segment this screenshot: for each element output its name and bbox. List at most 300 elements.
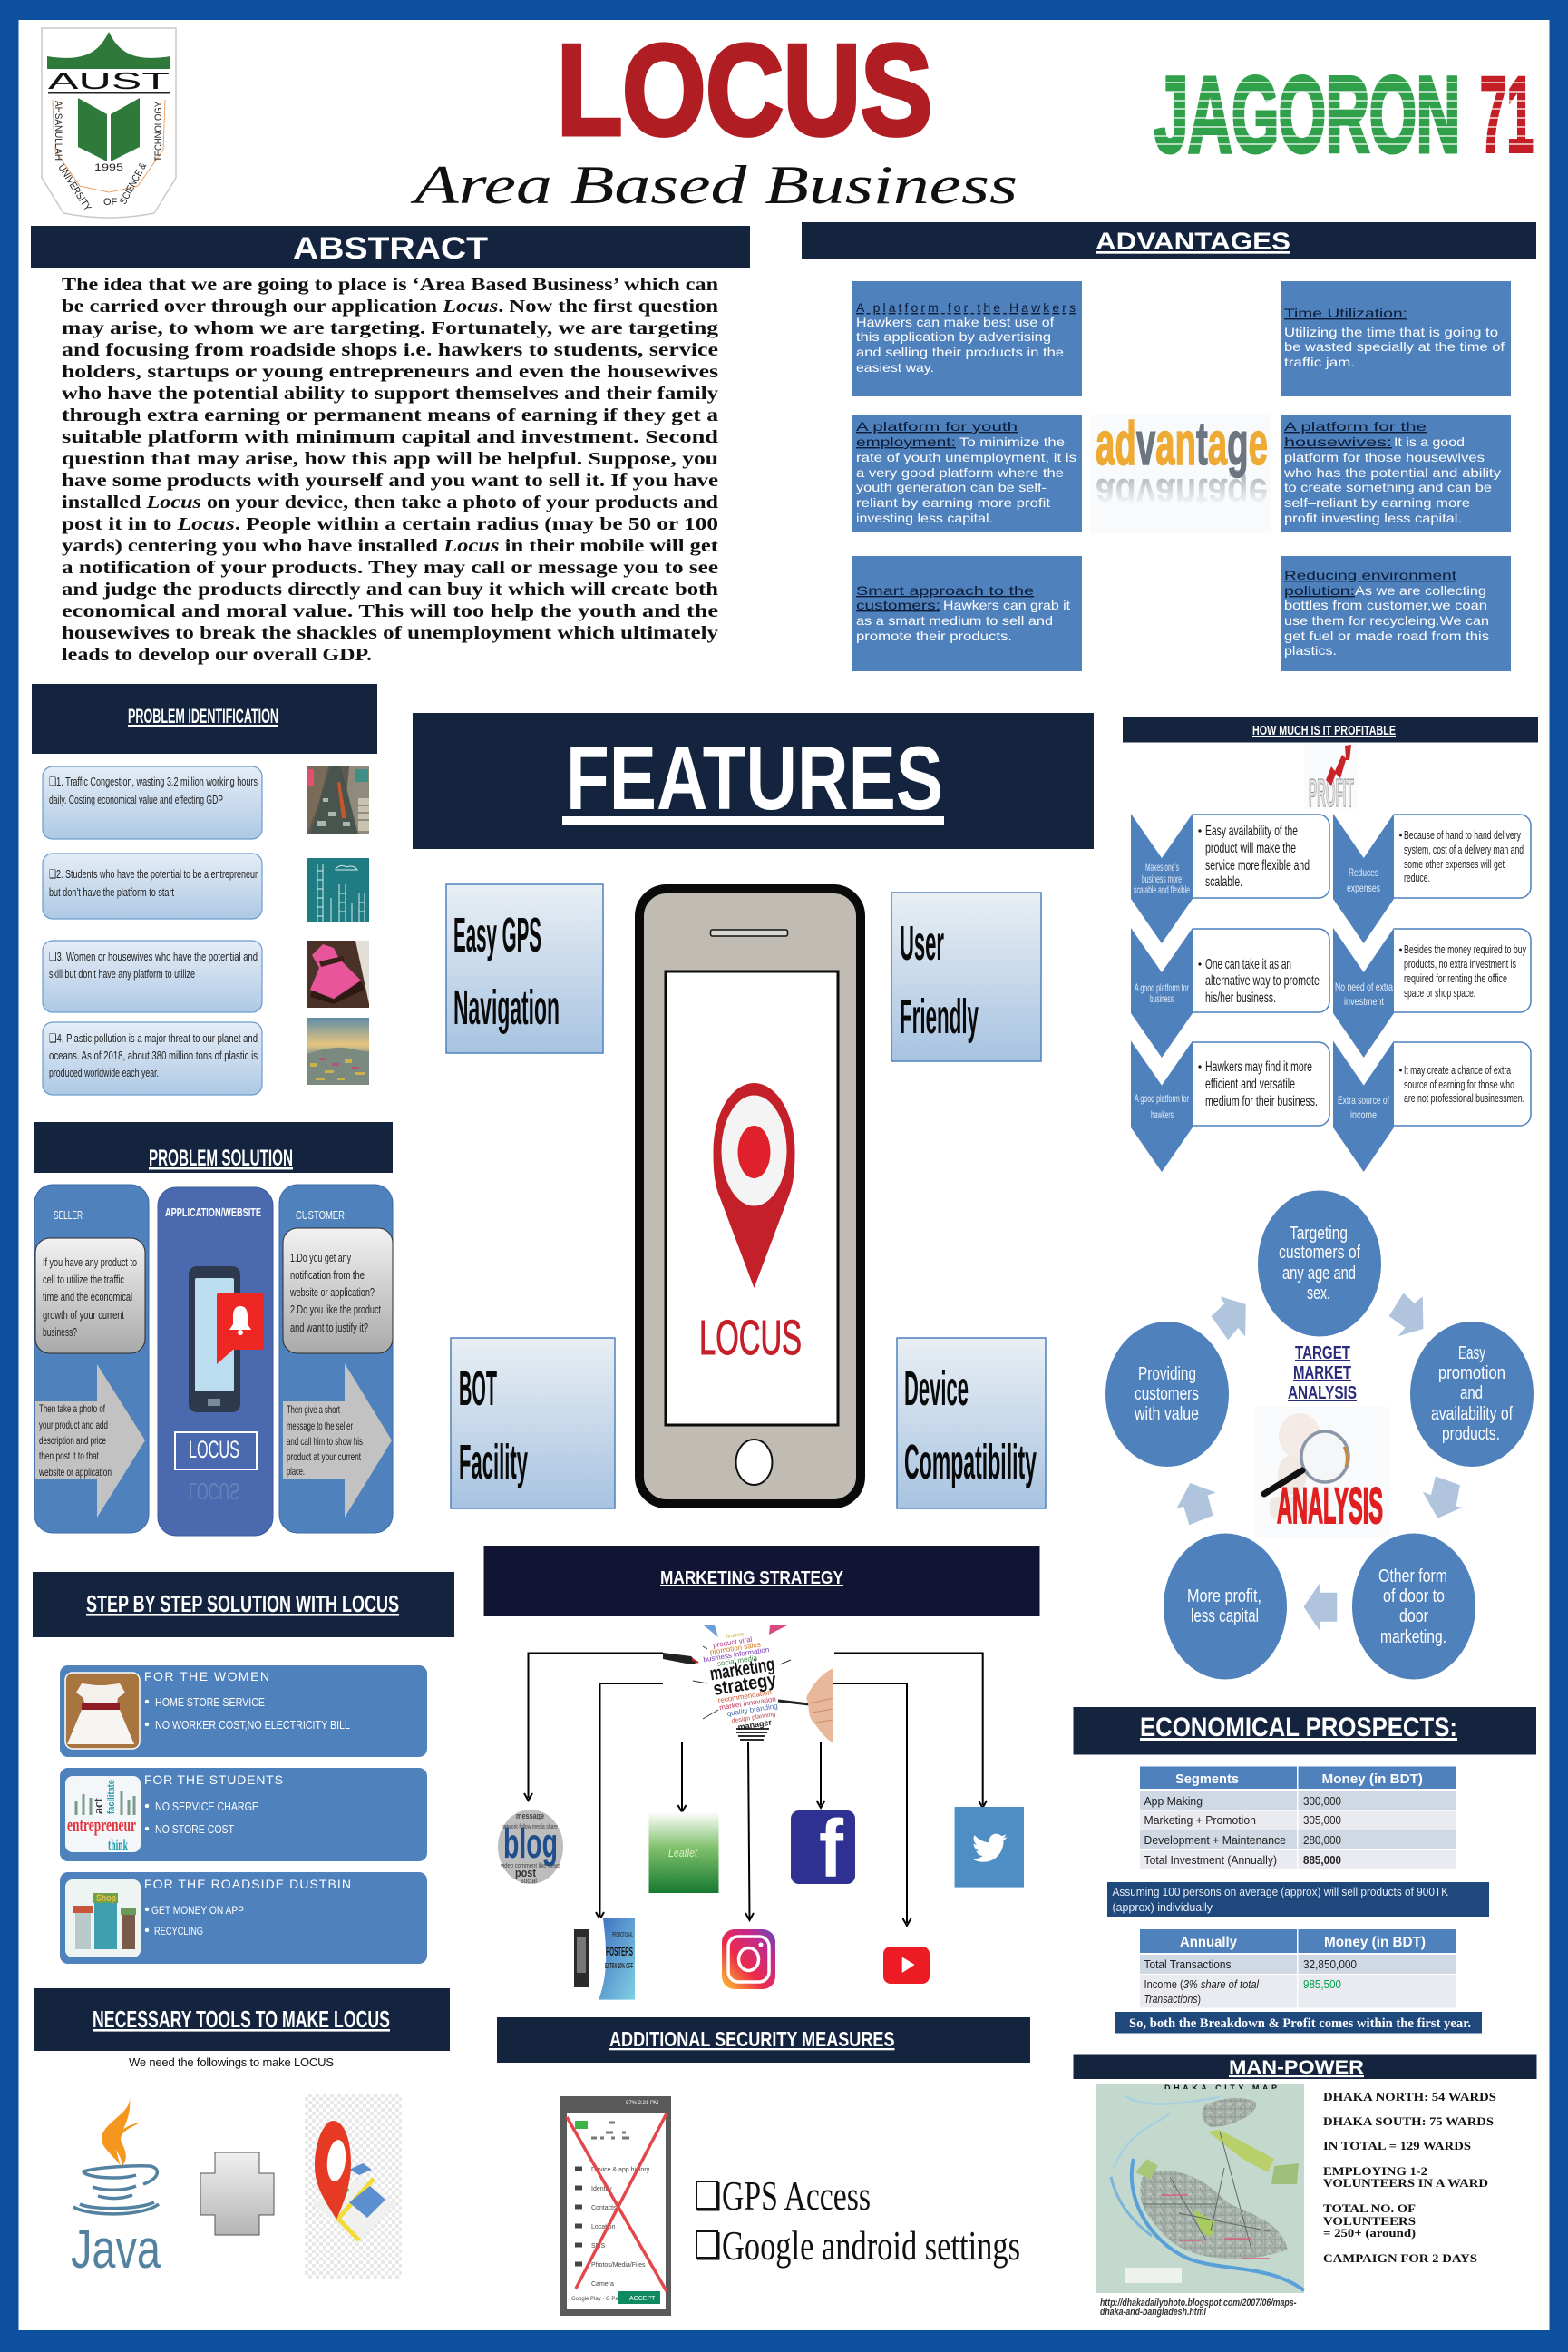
step: for the students: FOR THE STUDENTS bbox=[144, 1772, 283, 1787]
illustration: marketing strategy bulb: social media bbox=[716, 1654, 758, 1668]
icon: blog: network follow media share bbox=[502, 1824, 558, 1830]
card: platform for the hawkers: Hawkers can make best use of bbox=[856, 315, 1054, 329]
table: investment: 280,000 bbox=[1303, 1833, 1341, 1847]
image: android permissions screenshot: Device & app history bbox=[591, 2167, 650, 2173]
table: annual income: Transactions) bbox=[1144, 1992, 1201, 2006]
icon: blog: message bbox=[516, 1811, 544, 1820]
panel: marketing strategy: POSTERS bbox=[606, 1944, 633, 1958]
text: ward facts: CAMPAIGN FOR 2 DAYS bbox=[1323, 2251, 1477, 2265]
photo: pink dress bbox=[307, 941, 369, 1008]
card: platform for the hawkers: A platform for the Hawkers bbox=[856, 300, 1076, 315]
step: for the roadside dustbin bbox=[60, 1872, 427, 1964]
list: security measures bbox=[696, 2172, 1020, 2269]
card: reducing environment pollution: Reducing environment bbox=[1284, 568, 1456, 582]
illustration: marketing strategy bulb: quality branding bbox=[726, 1702, 778, 1718]
feature: bot facility: BOT bbox=[459, 1361, 497, 1416]
problem 4: oceans. As of 2018, about 380 million tons of plastic is bbox=[49, 1049, 258, 1062]
benefit row 1 left: scalable. bbox=[1205, 874, 1242, 890]
card: platform for youth employment: youth generation can be self- bbox=[856, 480, 1047, 494]
table: investment: Marketing + Promotion bbox=[1144, 1813, 1256, 1827]
card: platform for youth employment: A platform for youth bbox=[856, 419, 1018, 434]
benefit row 1 right: some other expenses will get bbox=[1404, 857, 1505, 871]
logo: AUST university crest: UNIVERSITY bbox=[55, 162, 93, 213]
image: android permissions screenshot: 87% 2:21 PM bbox=[626, 2101, 658, 2106]
step: for the students: NO STORE COST bbox=[155, 1822, 234, 1836]
arrow: customer next step: and call him to show his bbox=[287, 1435, 363, 1448]
logo: AUST university crest: OF bbox=[103, 197, 118, 208]
text: ward facts: VOLUNTEERS IN A WARD bbox=[1323, 2176, 1488, 2190]
heading: advantages bbox=[802, 222, 1536, 259]
problem 4: ❑4. Plastic pollution is a major threat to our planet and bbox=[49, 1031, 258, 1045]
problem 2: ❑2. Students who have the potential to be a entrepreneur bbox=[49, 867, 258, 881]
card: reducing environment pollution: plastics. bbox=[1284, 643, 1337, 658]
arrow: seller next step: Then take a photo of bbox=[39, 1402, 105, 1415]
card: platform for youth employment: investing less capital. bbox=[856, 511, 993, 525]
table: annual income: Annually bbox=[1180, 1935, 1237, 1950]
heading: step by step bbox=[33, 1572, 454, 1637]
image: android permissions screenshot: Google Play · G Pay bbox=[571, 2297, 621, 2302]
abstract text: suitable platform with minimum capital and investment. Second bbox=[62, 427, 718, 447]
circle: door to door: door bbox=[1399, 1606, 1428, 1626]
heading: man-power: MAN-POWER bbox=[1229, 2057, 1364, 2078]
problem 2: but don’t have the platform to start bbox=[49, 885, 174, 899]
image: analysis figure bbox=[1255, 1407, 1390, 1537]
title: LOCUS bbox=[557, 18, 932, 162]
feature: easy gps navigation: Navigation bbox=[453, 981, 560, 1035]
image: android permissions screenshot: Location bbox=[591, 2224, 616, 2230]
icon: facebook bbox=[791, 1804, 855, 1895]
circle: door to door bbox=[1352, 1533, 1475, 1680]
step: for the students: NO SERVICE CHARGE bbox=[155, 1800, 258, 1813]
icon: promotional posters: EXTRA 10% OFF bbox=[605, 1962, 633, 1970]
card: reducing environment pollution: use them for recycleing.We can bbox=[1284, 613, 1489, 628]
benefit row 3 left: medium for their business. bbox=[1205, 1094, 1318, 1109]
circle: door to door: marketing. bbox=[1380, 1627, 1446, 1647]
image: shop street bbox=[65, 1879, 141, 1957]
benefit row 1 left: Easy availability of the bbox=[1205, 824, 1298, 839]
text: ward facts: DHAKA SOUTH: 75 WARDS bbox=[1323, 2114, 1494, 2128]
heading: marketing strategy: MARKETING STRATEGY bbox=[660, 1568, 844, 1588]
text: ward facts: = 250+ (around) bbox=[1323, 2226, 1416, 2240]
map source caption: dhaka-and-bangladesh.html bbox=[1100, 2307, 1207, 2318]
heading: target market analysis: TARGET bbox=[1295, 1343, 1350, 1363]
benefit row 1 left: business more bbox=[1142, 873, 1182, 885]
benefit row 2 right: No need of extra bbox=[1335, 981, 1393, 993]
panel: additional security measures bbox=[497, 2017, 1030, 2316]
heading: problem solution: PROBLEM SOLUTION bbox=[149, 1146, 293, 1171]
abstract text: yards) centering you who have installed Locus in their mobile will get bbox=[62, 536, 718, 556]
card: reducing environment pollution: As we are collecting bbox=[1355, 583, 1486, 598]
icon: blog: video comment like news bbox=[501, 1863, 560, 1869]
text: ward facts bbox=[1323, 2090, 1496, 2265]
icon: profit bbox=[1304, 744, 1358, 815]
abstract text: economical and moral value. This will too help the youth and the bbox=[62, 601, 718, 621]
image: android permissions screenshot: Camera bbox=[591, 2281, 614, 2288]
circle: providing value: customers bbox=[1135, 1384, 1199, 1404]
abstract text: leads to develop our overall GDP. bbox=[62, 645, 372, 665]
card: platform for youth employment: rate of youth unemployment, it is bbox=[856, 450, 1076, 464]
card: reducing environment pollution: bottles from customer,we coan bbox=[1284, 598, 1487, 612]
abstract text: The idea that we are going to place is ‘Area Based Business’ which can bbox=[62, 275, 718, 295]
logo: AUST university crest: AUST bbox=[48, 67, 170, 94]
text: ward facts: VOLUNTEERS bbox=[1323, 2214, 1416, 2228]
column: customer bbox=[279, 1185, 393, 1533]
step: for the women: FOR THE WOMEN bbox=[144, 1669, 269, 1683]
circle: providing value: Providing bbox=[1138, 1364, 1196, 1384]
heading: target market analysis bbox=[1288, 1343, 1357, 1403]
heading: necessary tools: NECESSARY TOOLS TO MAKE LOCUS bbox=[93, 2006, 390, 2033]
arrows: channels bbox=[524, 1653, 987, 1926]
heading: necessary tools bbox=[34, 1988, 450, 2051]
icon: java logo: Java bbox=[71, 2219, 161, 2279]
image: dhaka city map bbox=[1096, 2084, 1304, 2293]
heading: features: FEATURES bbox=[566, 727, 943, 828]
card: time utilization: Utilizing the time that is going to bbox=[1284, 325, 1498, 339]
arrow: customer next step bbox=[283, 1363, 392, 1518]
table: annual income: Income (3% share of total bbox=[1144, 1977, 1260, 1991]
step: for the women: NO WORKER COST,NO ELECTRICITY BILL bbox=[155, 1718, 350, 1732]
image: advantage wordart bbox=[1090, 409, 1271, 533]
card: smart approach to the customers: promote their products. bbox=[856, 629, 1012, 643]
label: locus: LOCUS bbox=[189, 1478, 239, 1505]
benefit row 1 right: reduce. bbox=[1404, 871, 1430, 884]
illustration: marketing strategy bulb: manager bbox=[737, 1717, 773, 1732]
illustration: marketing strategy bulb: product viral bbox=[712, 1635, 753, 1649]
illustration: marketing strategy bulb: strategy bbox=[712, 1669, 778, 1700]
card: smart approach to the customers: as a smart medium to sell and bbox=[856, 613, 1053, 628]
panel: target market analysis cycle bbox=[1105, 1190, 1534, 1680]
benefit row 1 left: Makes one’s bbox=[1145, 861, 1179, 873]
table: annual income: 985,500 bbox=[1303, 1977, 1341, 1991]
card: platform for youth employment: a very good platform where the bbox=[856, 465, 1064, 480]
callout: seller question: business? bbox=[43, 1325, 77, 1339]
photo: traffic congestion bbox=[307, 766, 369, 834]
abstract text: holders, startups or young entrepreneurs and even the housewives bbox=[62, 362, 718, 382]
table: investment: 300,000 bbox=[1303, 1794, 1341, 1808]
card: smart approach to the customers: Smart approach to the bbox=[856, 583, 1034, 598]
icon: twitter bbox=[955, 1807, 1024, 1888]
column: seller: SELLER bbox=[54, 1208, 83, 1222]
heading: profitable bbox=[1123, 717, 1538, 742]
card: time utilization: be wasted specially at the time of bbox=[1284, 339, 1505, 354]
card: smart approach to the customers bbox=[852, 556, 1082, 671]
card: platform for the hawkers: this application by advertising bbox=[856, 329, 1051, 344]
heading: abstract: ABSTRACT bbox=[293, 231, 488, 266]
illustration: marketing strategy bulb: market innovation bbox=[719, 1694, 776, 1712]
problem 2 bbox=[43, 854, 262, 919]
abstract text bbox=[62, 275, 718, 665]
feature: easy gps navigation: Easy GPS bbox=[453, 908, 541, 962]
feature: user friendly: Friendly bbox=[900, 990, 979, 1044]
abstract text: through extra earning or permanent means of earning if they get a bbox=[62, 405, 718, 425]
circle: targeting customers: Targeting bbox=[1290, 1224, 1348, 1244]
card: time utilization bbox=[1281, 281, 1511, 396]
card: reducing environment pollution: get fuel or made road from this bbox=[1284, 629, 1489, 643]
arrow: customer next step: place. bbox=[287, 1465, 305, 1478]
image: android permissions screenshot: ACCEPT bbox=[629, 2296, 656, 2302]
arrow: seller next step: website or application bbox=[38, 1466, 112, 1479]
card: reducing environment pollution bbox=[1281, 556, 1511, 671]
icon: promotional posters bbox=[566, 1918, 635, 2000]
problem 3: ❑3. Women or housewives who have the potential and bbox=[49, 950, 258, 963]
card: platform for the housewives: profit investing less capital. bbox=[1284, 511, 1462, 525]
card: reducing environment pollution: pollution: bbox=[1284, 583, 1355, 598]
logo: AUST university crest: AHSANULLAH bbox=[53, 101, 63, 161]
illustration: marketing strategy bulb: recommendation bbox=[717, 1688, 772, 1704]
table: investment: 885,000 bbox=[1303, 1853, 1341, 1867]
column: application / website: APPLICATION/WEBSITE bbox=[165, 1205, 261, 1219]
problem 3 bbox=[43, 941, 262, 1012]
table: investment: Total Investment (Annually) bbox=[1144, 1853, 1277, 1867]
callout: assumption: (approx) individually bbox=[1112, 1900, 1213, 1914]
circle: easy promotion: promotion bbox=[1438, 1363, 1505, 1383]
benefit row 3 right: source of earning for those who bbox=[1404, 1078, 1514, 1091]
panel: step by step solution bbox=[33, 1572, 454, 1964]
problem 1 bbox=[43, 766, 262, 839]
step: for the women bbox=[60, 1665, 427, 1757]
arrow: seller next step: description and price bbox=[39, 1434, 106, 1447]
text: ward facts: DHAKA NORTH: 54 WARDS bbox=[1323, 2090, 1496, 2103]
cycle arrows bbox=[1176, 1293, 1463, 1632]
heading: problem solution bbox=[34, 1122, 393, 1173]
callout: seller question: cell to utilize the traffic bbox=[43, 1273, 124, 1286]
image: entrepreneur word cloud: facilitate bbox=[106, 1780, 117, 1814]
circle: easy promotion: and bbox=[1460, 1383, 1483, 1403]
callout: conclusion bbox=[1115, 2012, 1482, 2034]
image: android permissions screenshot: SMS bbox=[591, 2243, 606, 2250]
heading: advantages: ADVANTAGES bbox=[1096, 228, 1290, 255]
panel: target market analysis cycle: ANALYSIS bbox=[1277, 1477, 1383, 1534]
map source caption: http://dhakadailyphoto.blogspot.com/2007/06/maps- bbox=[1100, 2298, 1297, 2308]
abstract text: question that may arise, how this app will be helpful. Suppose, you bbox=[62, 449, 718, 469]
card: platform for youth employment: employment: bbox=[856, 434, 956, 449]
map source caption bbox=[1100, 2298, 1297, 2318]
step: for the roadside dustbin: GET MONEY ON APP bbox=[151, 1904, 244, 1917]
benefit row 3 left: Hawkers may find it more bbox=[1205, 1059, 1312, 1075]
circle: easy promotion bbox=[1410, 1322, 1534, 1467]
icon: instagram bbox=[722, 1929, 775, 1989]
panel: how much is it profitable: PROFIT bbox=[1309, 771, 1354, 815]
table: investment: Development + Maintenance bbox=[1144, 1833, 1286, 1847]
step: for the women: HOME STORE SERVICE bbox=[155, 1695, 265, 1709]
image: dhaka city map: DHAKA CITY MAP bbox=[1164, 2084, 1277, 2093]
heading: target market analysis: ANALYSIS bbox=[1288, 1383, 1357, 1403]
circle: more profit bbox=[1164, 1533, 1287, 1680]
heading: problem identification: PROBLEM IDENTIFICATION bbox=[128, 705, 278, 727]
benefit row 1 left: service more flexible and bbox=[1205, 858, 1310, 873]
feature: device compatibility bbox=[897, 1338, 1046, 1508]
icon: blog: blog bbox=[503, 1820, 558, 1867]
benefit row 2 left: alternative way to promote bbox=[1205, 973, 1320, 989]
benefit row 2 left: One can take it as an bbox=[1205, 957, 1291, 972]
card: platform for the hawkers: and selling their products in the bbox=[856, 345, 1064, 359]
arrow: seller next step: then post it to that bbox=[39, 1449, 99, 1462]
list: security measures: GPS Access bbox=[722, 2172, 871, 2219]
circle: providing value bbox=[1105, 1322, 1229, 1467]
photo: plastic pollution bbox=[307, 1018, 369, 1085]
arrow: seller next step: your product and add bbox=[39, 1419, 108, 1431]
benefit row 3 right: Extra source of bbox=[1338, 1094, 1389, 1107]
benefit row 2 left bbox=[1131, 928, 1329, 1058]
panel: features bbox=[413, 713, 1094, 1508]
heading: problem identification bbox=[32, 684, 377, 754]
card: time utilization: traffic jam. bbox=[1284, 355, 1355, 369]
abstract text: post it in to Locus . People within a certain radius (may be 50 or 100 bbox=[62, 514, 718, 534]
icon: leaflet bbox=[649, 1812, 718, 1893]
circle: providing value: with value bbox=[1134, 1404, 1199, 1424]
arrow: customer next step: Then give a short bbox=[287, 1403, 340, 1416]
card: platform for the housewives: A platform for the bbox=[1284, 419, 1427, 434]
table: annual income: Money (in BDT) bbox=[1324, 1935, 1426, 1950]
icon: blog: post bbox=[515, 1866, 537, 1879]
feature: user friendly: User bbox=[900, 916, 944, 971]
image: entrepreneur word cloud bbox=[65, 1776, 141, 1854]
image: android permissions screenshot bbox=[560, 2096, 671, 2316]
callout: seller question: growth of your current bbox=[43, 1308, 124, 1322]
benefit row 2 right: products, no extra investment is bbox=[1404, 957, 1516, 971]
icon: google maps pin bbox=[305, 2094, 402, 2279]
label: locus: LOCUS bbox=[189, 1436, 239, 1463]
panel: problem solution bbox=[34, 1122, 393, 1536]
benefit row 1 right bbox=[1333, 814, 1531, 943]
benefit row 1 left: product will make the bbox=[1205, 841, 1296, 856]
benefit row 1 left bbox=[1131, 814, 1329, 943]
heading: profitable: HOW MUCH IS IT PROFITABLE bbox=[1252, 723, 1396, 738]
callout: customer questions: notification from the bbox=[290, 1268, 365, 1282]
feature: bot facility bbox=[451, 1338, 615, 1508]
panel: economical prospects bbox=[1074, 1707, 1536, 2034]
card: platform for youth employment: reliant by earning more profit bbox=[856, 495, 1050, 510]
card: platform for youth employment bbox=[852, 415, 1082, 532]
feature: device compatibility: Device bbox=[904, 1361, 969, 1416]
circle: targeting customers: any age and bbox=[1282, 1264, 1356, 1283]
photo: white dress bbox=[65, 1673, 140, 1749]
image: shop street: Shop bbox=[96, 1893, 116, 1904]
abstract text: have some products with yourself and you want to sell it. If you have bbox=[62, 471, 718, 491]
heading: features bbox=[413, 713, 1094, 849]
logo: AUST university crest bbox=[42, 28, 176, 218]
heading: economical prospects: ECONOMICAL PROSPECTS: bbox=[1140, 1713, 1457, 1742]
problem 1: ❑1. Traffic Congestion, wasting 3.2 million working hours bbox=[49, 775, 258, 788]
problem 4 bbox=[43, 1022, 262, 1095]
table: investment bbox=[1140, 1767, 1456, 1869]
illustration: marketing strategy bulb: promotion sales bbox=[709, 1640, 761, 1656]
benefit row 2 left: business bbox=[1150, 992, 1174, 1005]
feature: bot facility: Facility bbox=[459, 1435, 528, 1489]
benefit row 1 right: Reduces bbox=[1349, 866, 1378, 879]
circle: easy promotion: availability of bbox=[1431, 1404, 1513, 1424]
panel: how much is it profitable bbox=[1123, 717, 1538, 1172]
illustration: marketing strategy bulb: finance bbox=[726, 1632, 745, 1640]
image: advantage wordart: advantage bbox=[1096, 409, 1268, 478]
circle: more profit: More profit, bbox=[1187, 1586, 1261, 1606]
callout: seller question: time and the economical bbox=[43, 1290, 132, 1303]
arrow: seller next step bbox=[35, 1364, 145, 1518]
callout: customer questions: and want to justify it? bbox=[290, 1321, 368, 1334]
image: android permissions screenshot: Contacts bbox=[591, 2205, 617, 2211]
circle: targeting customers: customers of bbox=[1279, 1243, 1360, 1263]
illustration: smartphone with locus pin: LOCUS bbox=[699, 1311, 802, 1365]
feature: easy gps navigation bbox=[446, 884, 603, 1053]
circle: more profit: less capital bbox=[1191, 1606, 1259, 1626]
illustration: marketing strategy bulb bbox=[663, 1625, 833, 1742]
callout: conclusion: So, both the Breakdown & Profit comes within the first year. bbox=[1129, 2016, 1471, 2031]
panel: man-power bbox=[1074, 2055, 1536, 2318]
abstract text: may arise, to whom we are targeting. Fortunately, we are targeting bbox=[62, 318, 718, 338]
benefit row 3 right: income bbox=[1350, 1108, 1377, 1121]
heading: security bbox=[497, 2017, 1030, 2063]
panel: features: Compatibility bbox=[904, 1435, 1037, 1489]
callout: seller question: If you have any product to bbox=[43, 1255, 137, 1269]
card: platform for the hawkers bbox=[852, 281, 1082, 396]
callout: customer questions: 1.Do you get any bbox=[290, 1251, 351, 1264]
logo: AUST university crest: 1995 bbox=[94, 162, 123, 173]
subtitle: Area Based Business bbox=[410, 155, 1018, 215]
abstract text: installed Locus on your device, then take a photo of your products and bbox=[62, 493, 718, 512]
card: platform for the housewives: to create something and can be bbox=[1284, 480, 1492, 494]
table: investment: App Making bbox=[1144, 1794, 1203, 1808]
benefit row 2 left: A good platform for bbox=[1135, 981, 1189, 994]
table: investment: Segments bbox=[1175, 1771, 1239, 1787]
benefit row 3 left: A good platform for bbox=[1135, 1092, 1189, 1105]
intro text: We need the followings to make LOCUS bbox=[129, 2055, 334, 2069]
logo: AUST university crest: SCIENCE & bbox=[118, 161, 149, 206]
card: platform for youth employment: To minimize the bbox=[959, 434, 1065, 449]
benefit row 3 left: efficient and versatile bbox=[1205, 1077, 1295, 1092]
abstract text: and focusing from roadside shops i.e. hawkers to students, service bbox=[62, 340, 718, 360]
benefit row 1 right: expenses bbox=[1347, 882, 1380, 894]
column: application / website bbox=[158, 1187, 273, 1536]
icon: phone with notification bbox=[189, 1266, 264, 1412]
circle: easy promotion: products. bbox=[1442, 1424, 1500, 1444]
callout: assumption bbox=[1107, 1882, 1489, 1917]
table: investment: Money (in BDT) bbox=[1322, 1771, 1423, 1787]
benefit row 2 right: space or shop space. bbox=[1404, 986, 1475, 1000]
abstract text: be carried over through our application Locus . Now the first question bbox=[62, 297, 718, 317]
text: ward facts: EMPLOYING 1-2 bbox=[1323, 2164, 1427, 2178]
abstract text: housewives to break the shackles of unemployment which ultimately bbox=[62, 623, 718, 643]
column: seller bbox=[34, 1185, 149, 1533]
table: annual income: 32,850,000 bbox=[1303, 1957, 1357, 1971]
image: android permissions screenshot: Identity bbox=[591, 2186, 612, 2192]
icon: blog: social bbox=[521, 1877, 537, 1885]
image: entrepreneur word cloud: act bbox=[92, 1798, 106, 1814]
image: entrepreneur word cloud: think bbox=[108, 1836, 128, 1854]
callout: customer questions bbox=[283, 1228, 393, 1353]
arrow: customer next step: product at your current bbox=[287, 1450, 361, 1463]
illustration: marketing strategy bulb: marketing bbox=[708, 1654, 776, 1684]
card: time utilization: Time Utilization: bbox=[1284, 306, 1407, 320]
benefit row 3 left: hawkers bbox=[1151, 1108, 1174, 1121]
card: platform for the housewives bbox=[1281, 415, 1511, 532]
heading: man-power bbox=[1074, 2055, 1536, 2079]
illustration: marketing strategy bulb: design planning bbox=[731, 1712, 776, 1724]
callout: assumption: Assuming 100 persons on average (approx) will sell products of 900TK bbox=[1112, 1885, 1448, 1898]
table: annual income bbox=[1140, 1929, 1456, 2008]
icon: facebook: f bbox=[819, 1804, 844, 1895]
icon: leaflet: Leaflet bbox=[668, 1846, 698, 1859]
photo: students chalkboard bbox=[307, 858, 369, 922]
problem 4: produced worldwide each year. bbox=[49, 1066, 159, 1079]
panel: abstract bbox=[31, 226, 750, 665]
card: smart approach to the customers: Hawkers can grab it bbox=[943, 598, 1070, 612]
problem 1: daily. Costing economical value and effecting GDP bbox=[49, 793, 223, 806]
image: android permissions screenshot: Photos/Media/Files bbox=[591, 2262, 646, 2269]
circle: door to door: of door to bbox=[1383, 1586, 1445, 1606]
list: security measures: Google android settings bbox=[722, 2222, 1020, 2269]
step: for the roadside dustbin: FOR THE ROADSIDE DUSTBIN bbox=[144, 1877, 351, 1891]
icon: java logo bbox=[71, 2096, 161, 2279]
